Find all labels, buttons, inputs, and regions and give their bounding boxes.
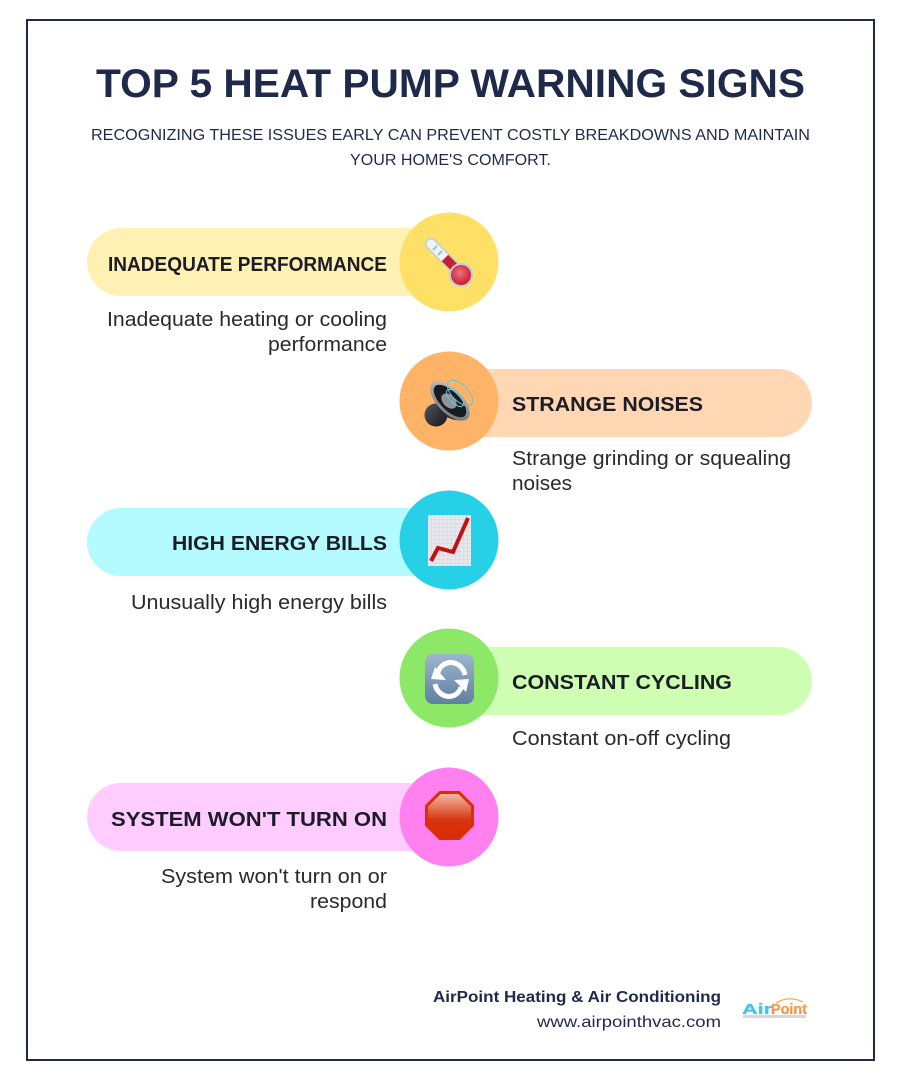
- logo: Point: [771, 1001, 807, 1018]
- description: Strange grinding or squealing: [512, 448, 791, 470]
- description: [512, 448, 791, 495]
- label: CONSTANT CYCLING: [512, 672, 732, 694]
- label: SYSTEM WON'T TURN ON: [111, 809, 387, 831]
- description: [107, 309, 387, 356]
- subtitle: [91, 127, 810, 169]
- description: respond: [310, 891, 387, 913]
- panel: constant cycling: [400, 628, 812, 750]
- label: INADEQUATE PERFORMANCE: [108, 254, 387, 276]
- description: [161, 866, 387, 913]
- logo: [742, 999, 807, 1018]
- panel: strange noises: [400, 352, 812, 495]
- label: HIGH ENERGY BILLS: [172, 533, 387, 555]
- description: Inadequate heating or cooling: [107, 309, 387, 331]
- subtitle: RECOGNIZING THESE ISSUES EARLY CAN PREVENT COSTLY BREAKDOWNS AND MAINTAIN: [91, 127, 810, 144]
- footer company details: [433, 989, 721, 1031]
- footer company details: AirPoint Heating & Air Conditioning: [433, 989, 721, 1006]
- footer company details: www.airpointhvac.com: [536, 1014, 721, 1031]
- logo: Air: [742, 1001, 772, 1018]
- icon: thermometer: [431, 244, 473, 287]
- title: TOP 5 HEAT PUMP WARNING SIGNS: [96, 62, 805, 106]
- subtitle: YOUR HOME'S COMFORT.: [350, 152, 551, 169]
- icon: stop sign: [426, 792, 472, 838]
- icon: speaker: [423, 374, 477, 428]
- description: Constant on-off cycling: [512, 728, 731, 750]
- description: Unusually high energy bills: [131, 592, 387, 614]
- description: performance: [268, 334, 387, 356]
- label: STRANGE NOISES: [512, 394, 703, 416]
- description: System won't turn on or: [161, 866, 387, 888]
- icon: cycling arrows: [425, 654, 474, 704]
- description: noises: [512, 473, 572, 495]
- panel: high energy bills: [87, 490, 498, 614]
- panel: inadequate performance: [87, 212, 498, 356]
- icon: rising chart: [428, 515, 471, 566]
- panel: system won't turn on: [87, 768, 498, 913]
